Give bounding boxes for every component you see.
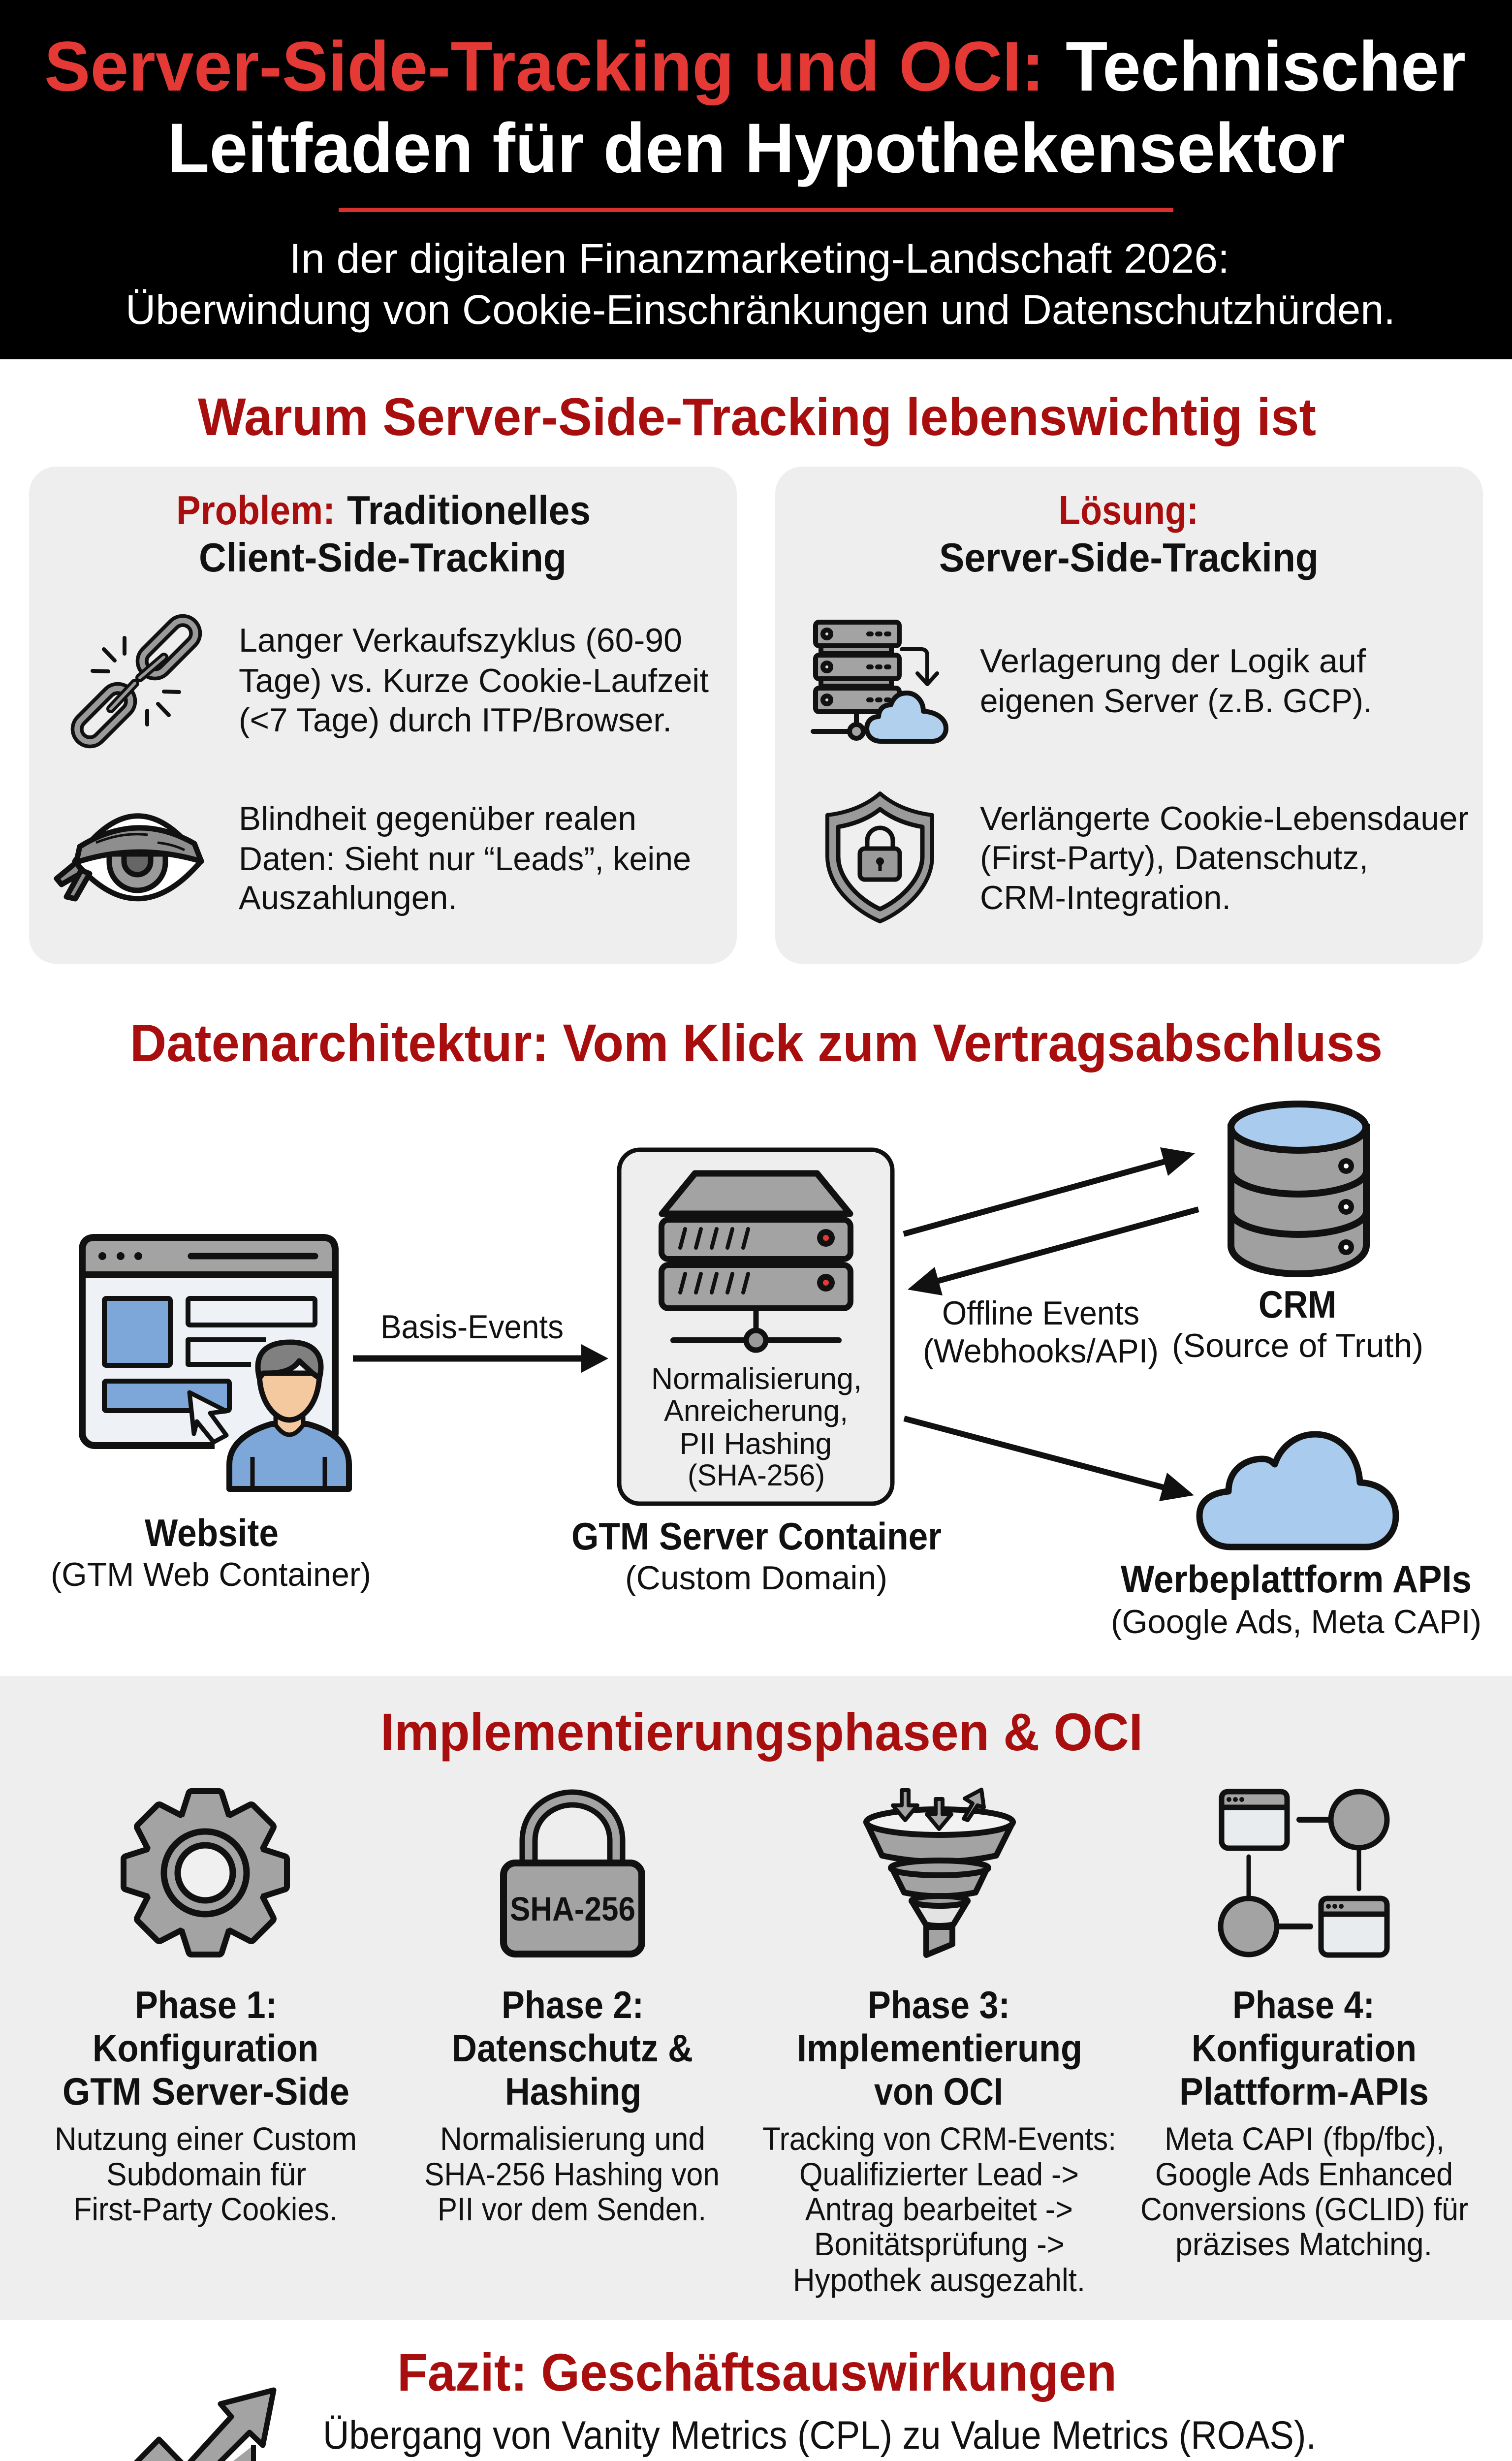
GTM server label <box>571 1514 942 1597</box>
phase 2 title: Phase 2: <box>502 1983 644 2026</box>
problem text 2: Daten: Sieht nur “Leads”, keine <box>239 840 691 878</box>
phase 3 text: Qualifizierter Lead -> <box>799 2156 1079 2192</box>
server processing text: Anreicherung, <box>664 1394 848 1427</box>
problem heading: Client-Side-Tracking <box>199 535 567 580</box>
server processing text: (SHA-256) <box>688 1458 825 1492</box>
subtitle: In der digitalen Finanzmarketing-Landschaft 2026: <box>289 235 1229 282</box>
solution text 2 <box>980 800 1469 916</box>
arrow: basis events <box>353 1308 608 1373</box>
problem text 2: Blindheit gegenüber realen <box>239 800 636 837</box>
node: GTM server container <box>619 1150 892 1504</box>
phase 4 text <box>1140 2120 1468 2262</box>
arrow: server to CRM <box>904 1147 1195 1234</box>
solution text 2: (First-Party), Datenschutz, <box>980 839 1368 877</box>
diagram: data architecture <box>51 1104 1481 1641</box>
arrow: server to ad platforms <box>904 1419 1194 1501</box>
arrow label: offline events: Offline Events <box>942 1294 1139 1332</box>
panel: solution <box>775 467 1483 964</box>
title: Leitfaden für den Hypothekensektor <box>167 109 1345 188</box>
phase 2 title: Datenschutz & <box>452 2026 693 2070</box>
website label: Website <box>145 1511 279 1554</box>
phase 3 text: Tracking von CRM-Events: <box>762 2120 1116 2157</box>
icon: broken chain <box>72 615 201 747</box>
phase 4 title: Phase 4: <box>1232 1983 1375 2026</box>
phase 1 <box>55 1794 357 2227</box>
heading: implementation phases: Implementierungsphasen & OCI <box>380 1702 1143 1762</box>
phase 2 title <box>452 1983 693 2113</box>
conclusion text: Übergang von Vanity Metrics (CPL) zu Value Metrics (ROAS). <box>323 2413 1316 2458</box>
CRM label: CRM <box>1259 1283 1336 1326</box>
solution heading <box>939 487 1319 580</box>
heading: why server-side tracking: Warum Server-Side-Tracking lebenswichtig ist <box>198 387 1316 446</box>
icon: cloud <box>1199 1434 1396 1547</box>
phase 1 title: Phase 1: <box>135 1983 277 2026</box>
phase 1 text <box>55 2120 357 2227</box>
phase 3 <box>762 1790 1116 2298</box>
icon: server <box>662 1173 850 1350</box>
phase 3 text: Antrag bearbeitet -> <box>805 2191 1073 2227</box>
phase 2 title: Hashing <box>505 2070 641 2113</box>
node: ad platform APIs <box>1111 1434 1481 1641</box>
phase 4 title: Plattform-APIs <box>1179 2070 1429 2113</box>
panel: problem <box>29 467 737 964</box>
phase 4 title <box>1179 1983 1429 2113</box>
title <box>44 28 1466 188</box>
phase 3 title: Phase 3: <box>868 1983 1010 2026</box>
solution text 1: Verlagerung der Logik auf <box>980 642 1366 680</box>
arrow: CRM to server <box>908 1209 1198 1295</box>
phase 1 title <box>63 1983 349 2113</box>
phase 3 text: Bonitätsprüfung -> <box>814 2226 1065 2262</box>
icon: growth chart <box>106 2390 274 2461</box>
icon: shield with lock <box>827 793 932 921</box>
phase 2 <box>424 1798 720 2227</box>
phase 3 title: von OCI <box>874 2070 1003 2113</box>
solution heading: Lösung: <box>1059 487 1198 533</box>
phase 1 text: Nutzung einer Custom <box>55 2120 357 2157</box>
phase 4 title: Konfiguration <box>1192 2026 1417 2070</box>
phase 1 title: Konfiguration <box>93 2026 318 2070</box>
problem text 1 <box>239 622 709 739</box>
header band <box>0 0 1512 359</box>
arrow: basis events: Basis-Events <box>380 1308 564 1346</box>
phase 1 title: GTM Server-Side <box>63 2070 349 2113</box>
icon: padlock <box>504 1798 642 1954</box>
subtitle: Überwindung von Cookie-Einschränkungen und Datenschutzhürden. <box>126 286 1395 333</box>
arrow label: offline events <box>923 1294 1159 1370</box>
arrow label: offline events: (Webhooks/API) <box>923 1332 1159 1370</box>
solution text 2: CRM-Integration. <box>980 879 1231 916</box>
icon: server and cloud <box>813 622 946 741</box>
CRM label: (Source of Truth) <box>1172 1327 1423 1364</box>
phase 1 text: Subdomain für <box>106 2156 306 2192</box>
GTM server label: GTM Server Container <box>571 1514 942 1558</box>
phase 4 text: präzises Matching. <box>1175 2226 1432 2262</box>
phase 2 text <box>424 2120 720 2227</box>
solution text 1 <box>980 642 1372 720</box>
phase 2 text: SHA-256 Hashing von <box>424 2156 720 2192</box>
phase 4 text: Google Ads Enhanced <box>1155 2156 1453 2192</box>
server processing text: PII Hashing <box>680 1427 832 1460</box>
GTM server label: (Custom Domain) <box>625 1559 887 1597</box>
icon: padlock: SHA-256 <box>510 1890 635 1928</box>
node: website <box>51 1237 371 1593</box>
phase 3 text <box>762 2120 1116 2298</box>
panel: implementation phases <box>0 1676 1512 2320</box>
solution text 1: eigenen Server (z.B. GCP). <box>980 682 1372 720</box>
problem text 2: Auszahlungen. <box>239 879 457 916</box>
problem text 1: Langer Verkaufszyklus (60-90 <box>239 622 682 659</box>
phase 3 title <box>797 1983 1082 2113</box>
problem heading: Problem: <box>176 487 335 533</box>
problem text 2 <box>239 800 691 916</box>
section: conclusion <box>106 2342 1316 2461</box>
ad platforms label <box>1111 1557 1481 1641</box>
icon: funnel <box>866 1790 1013 1955</box>
phase 3 title: Implementierung <box>797 2026 1082 2070</box>
problem heading <box>176 487 591 580</box>
problem text 1: (<7 Tage) durch ITP/Browser. <box>239 701 672 739</box>
icon: database <box>1231 1104 1366 1274</box>
phase 4 <box>1140 1792 1468 2262</box>
heading: data architecture: Datenarchitektur: Vom Klick zum Vertragsabschluss <box>130 1013 1383 1073</box>
icon: blindfolded eye <box>57 816 201 899</box>
solution text 2: Verlängerte Cookie-Lebensdauer <box>980 800 1469 837</box>
phase 3 text: Hypothek ausgezahlt. <box>793 2262 1085 2298</box>
problem heading: Traditionelles <box>347 487 591 533</box>
phase 1 text: First-Party Cookies. <box>73 2191 338 2227</box>
website label: (GTM Web Container) <box>51 1556 371 1593</box>
subtitle <box>126 235 1395 333</box>
icon: gear <box>126 1794 284 1952</box>
ad platforms label: Werbeplattform APIs <box>1121 1557 1472 1601</box>
problem text 1: Tage) vs. Kurze Cookie-Laufzeit <box>239 662 709 699</box>
heading: conclusion: Fazit: Geschäftsauswirkungen <box>397 2342 1117 2402</box>
phase 4 text: Meta CAPI (fbp/fbc), <box>1165 2120 1445 2157</box>
phase 2 text: PII vor dem Senden. <box>438 2191 706 2227</box>
phase 4 text: Conversions (GCLID) für <box>1140 2191 1468 2227</box>
ad platforms label: (Google Ads, Meta CAPI) <box>1111 1603 1481 1641</box>
title: Server-Side-Tracking und OCI: <box>44 28 1044 106</box>
icon: connected windows and nodes <box>1221 1792 1387 1955</box>
title: Technischer <box>1066 28 1466 106</box>
solution heading: Server-Side-Tracking <box>939 535 1319 580</box>
CRM label <box>1172 1283 1423 1364</box>
server processing text: Normalisierung, <box>651 1362 862 1395</box>
server processing text <box>651 1362 862 1492</box>
website label <box>51 1511 371 1593</box>
phase 2 text: Normalisierung und <box>440 2120 705 2157</box>
node: CRM <box>1172 1104 1423 1364</box>
